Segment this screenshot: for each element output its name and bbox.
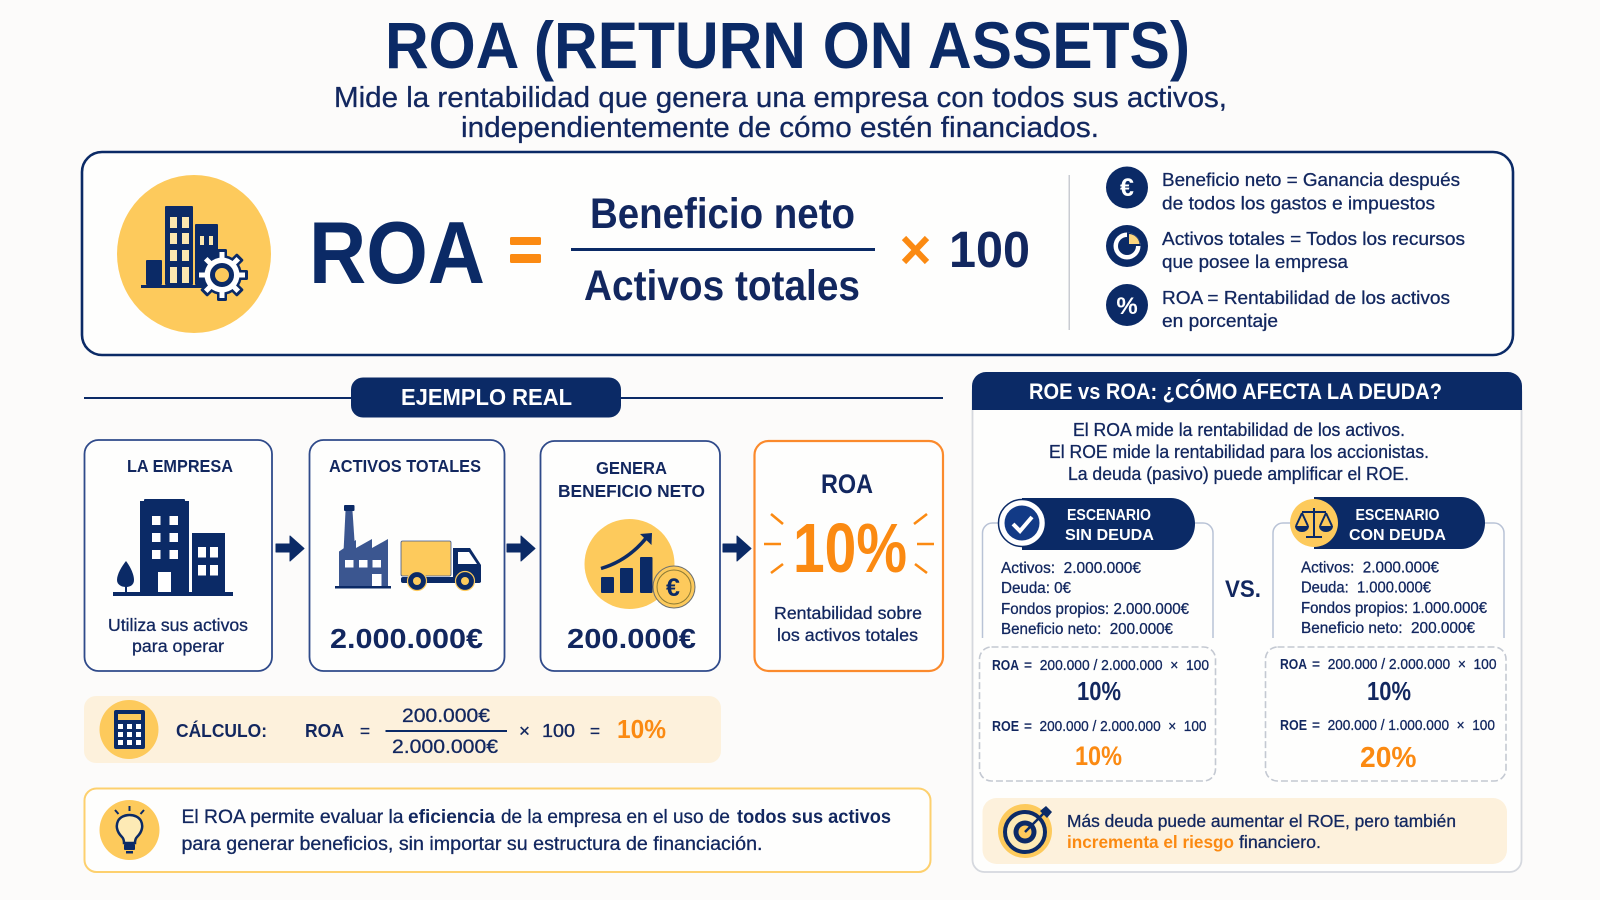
callout: eficiencia [84, 788, 930, 872]
definition: beneficio neto: de todos los gastos e impuestos [1162, 192, 1435, 214]
panel: cálculo: 2.000.000€ [392, 737, 498, 758]
panel: cálculo: CÁLCULO: [176, 720, 267, 741]
icon: factory [335, 505, 391, 588]
icon: percent [1106, 284, 1148, 326]
scenario header [1290, 497, 1485, 549]
icon: target [998, 804, 1052, 858]
formula: equals sign [510, 237, 541, 263]
panel: cálculo: = [360, 720, 370, 741]
definition: ROA [1106, 284, 1450, 331]
results: sin deuda: 10% [1075, 741, 1122, 771]
icon: truck [401, 541, 481, 590]
scenario: sin deuda: Deuda: 0€ [1001, 580, 1071, 597]
scenario: con deuda: Activos: 2.000.000€ [1301, 560, 1439, 576]
heading: ejemplo real [351, 378, 621, 418]
results: con deuda: 20% [1360, 742, 1417, 774]
subtitle: Mide la rentabilidad que genera una empresa con todos sus activos, [334, 82, 1227, 114]
scenario header: SIN DEUDA [1065, 527, 1154, 544]
formula: multiply sign [904, 238, 927, 262]
subtitle: independientemente de cómo estén financiados. [461, 112, 1099, 144]
definition: beneficio neto [1106, 166, 1460, 214]
card: resultado ROA: los activos totales [777, 625, 918, 645]
scenario header: ESCENARIO [1356, 507, 1440, 524]
card: la empresa: LA EMPRESA [127, 456, 233, 476]
callout: eficiencia: para generar beneficios, sin importar su estructura de financiación. [182, 834, 762, 855]
definition: beneficio neto: Beneficio neto = Ganancia después [1162, 169, 1460, 190]
results: con deuda: 10% [1367, 676, 1411, 706]
results: con deuda: ROA [1280, 657, 1307, 673]
arrow [723, 536, 751, 561]
results: con deuda: = 200.000 / 1.000.000 × 100 [1312, 718, 1495, 734]
results: sin deuda: ROA [992, 658, 1019, 674]
card: resultado ROA: ROA [821, 469, 873, 499]
formula: fraction: Activos totales [584, 262, 860, 310]
callout: riesgo: incrementa el riesgo [1067, 832, 1234, 852]
formula: ROA: ROA [309, 203, 485, 302]
callout: riesgo: Más deuda puede aumentar el ROE, pero también [1067, 811, 1456, 831]
icon: growth chart with coin: € [666, 574, 680, 602]
heading: ejemplo real: EJEMPLO REAL [401, 384, 572, 410]
card: la empresa: para operar [132, 636, 224, 656]
intro text: La deuda (pasivo) puede amplificar el ROE. [1068, 464, 1409, 484]
scenario: sin deuda: Beneficio neto: 200.000€ [1001, 621, 1173, 638]
icon: growth chart with coin [584, 519, 695, 609]
scenario: con deuda: Beneficio neto: 200.000€ [1301, 620, 1475, 637]
card: genera beneficio neto [540, 441, 720, 671]
scenario: sin deuda: Activos: 2.000.000€ [1001, 560, 1141, 577]
icon: euro: € [1120, 174, 1134, 202]
card: activos totales: ACTIVOS TOTALES [329, 456, 481, 476]
card: resultado ROA: 10% [793, 509, 907, 587]
icon: calculator [100, 700, 158, 759]
panel: cálculo: 10% [617, 714, 666, 744]
panel: cálculo: = [590, 720, 600, 741]
arrow [507, 536, 535, 561]
title: ROA (RETURN ON ASSETS) [385, 8, 1190, 82]
panel: cálculo [84, 696, 721, 763]
card: genera beneficio neto: GENERA [596, 458, 667, 478]
panel: formula [82, 152, 1513, 355]
results: con deuda [1266, 647, 1506, 781]
intro text: El ROA mide la rentabilidad de los activos. [1073, 420, 1405, 440]
icon: highlight rays [764, 514, 934, 573]
scenario: con deuda: Deuda: 1.000.000€ [1301, 580, 1431, 596]
arrow [276, 536, 304, 561]
icon: percent: % [1116, 293, 1138, 320]
icon: euro [1106, 166, 1148, 208]
scenario: con deuda: Fondos propios: 1.000.000€ [1301, 600, 1487, 617]
icon: pie chart [1106, 225, 1148, 267]
card: la empresa [84, 440, 272, 671]
intro text: El ROE mide la rentabilidad para los accionistas. [1049, 442, 1429, 462]
definition: ROA: ROA = Rentabilidad de los activos [1162, 287, 1450, 308]
icon: office buildings [113, 499, 233, 596]
results: con deuda: = 200.000 / 2.000.000 × 100 [1312, 657, 1496, 673]
panel header [972, 372, 1522, 410]
results: sin deuda: = 200.000 / 2.000.000 × 100 [1024, 719, 1206, 735]
callout: eficiencia: El ROA permite evaluar la [182, 807, 404, 828]
panel: ROE vs ROA [972, 372, 1522, 872]
results: sin deuda: ROE [992, 719, 1019, 735]
formula: fraction: Beneficio neto [590, 190, 855, 238]
card: activos totales [310, 440, 504, 671]
results: sin deuda: 10% [1077, 676, 1121, 706]
callout: eficiencia: eficiencia [408, 807, 495, 828]
scenario header: CON DEUDA [1349, 527, 1446, 544]
callout: riesgo [982, 798, 1507, 864]
formula: 100: 100 [949, 221, 1030, 278]
card: genera beneficio neto: BENEFICIO NETO [558, 481, 705, 501]
card: resultado ROA [754, 441, 943, 671]
callout: eficiencia: de la empresa en el uso de [501, 807, 730, 828]
intro text [1049, 420, 1429, 484]
scenario: con deuda [1273, 497, 1504, 638]
callout: eficiencia: todos sus activos [737, 807, 891, 828]
card: resultado ROA: Rentabilidad sobre [774, 603, 922, 623]
definition: ROA: en porcentaje [1162, 310, 1278, 331]
panel: cálculo: 100 [542, 720, 575, 741]
panel: cálculo: 200.000€ [402, 706, 490, 727]
results: con deuda: ROE [1280, 718, 1307, 734]
panel: cálculo: × [519, 720, 530, 741]
callout: riesgo: financiero. [1239, 832, 1321, 852]
card: la empresa: Utiliza sus activos [108, 615, 248, 635]
icon: building with gear [117, 175, 271, 333]
results: sin deuda: = 200.000 / 2.000.000 × 100 [1024, 658, 1209, 674]
definition: activos totales: Activos totales = Todos los recursos [1162, 228, 1465, 249]
icon: light bulb [100, 800, 160, 860]
versus label: VS. [1225, 576, 1261, 603]
definition: activos totales [1106, 225, 1465, 272]
card: activos totales: 2.000.000€ [330, 623, 483, 654]
results: sin deuda [980, 647, 1216, 781]
panel: cálculo: ROA [305, 720, 344, 741]
scenario: sin deuda [982, 498, 1213, 638]
panel header: ROE vs ROA: ¿CÓMO AFECTA LA DEUDA? [1029, 379, 1442, 404]
scenario: sin deuda: Fondos propios: 2.000.000€ [1001, 601, 1189, 618]
scenario header [998, 498, 1195, 550]
formula: fraction [571, 190, 875, 310]
subtitle [334, 82, 1227, 144]
scenario header: ESCENARIO [1067, 507, 1151, 524]
definition: activos totales: que posee la empresa [1162, 251, 1349, 272]
card: genera beneficio neto: 200.000€ [567, 623, 696, 654]
